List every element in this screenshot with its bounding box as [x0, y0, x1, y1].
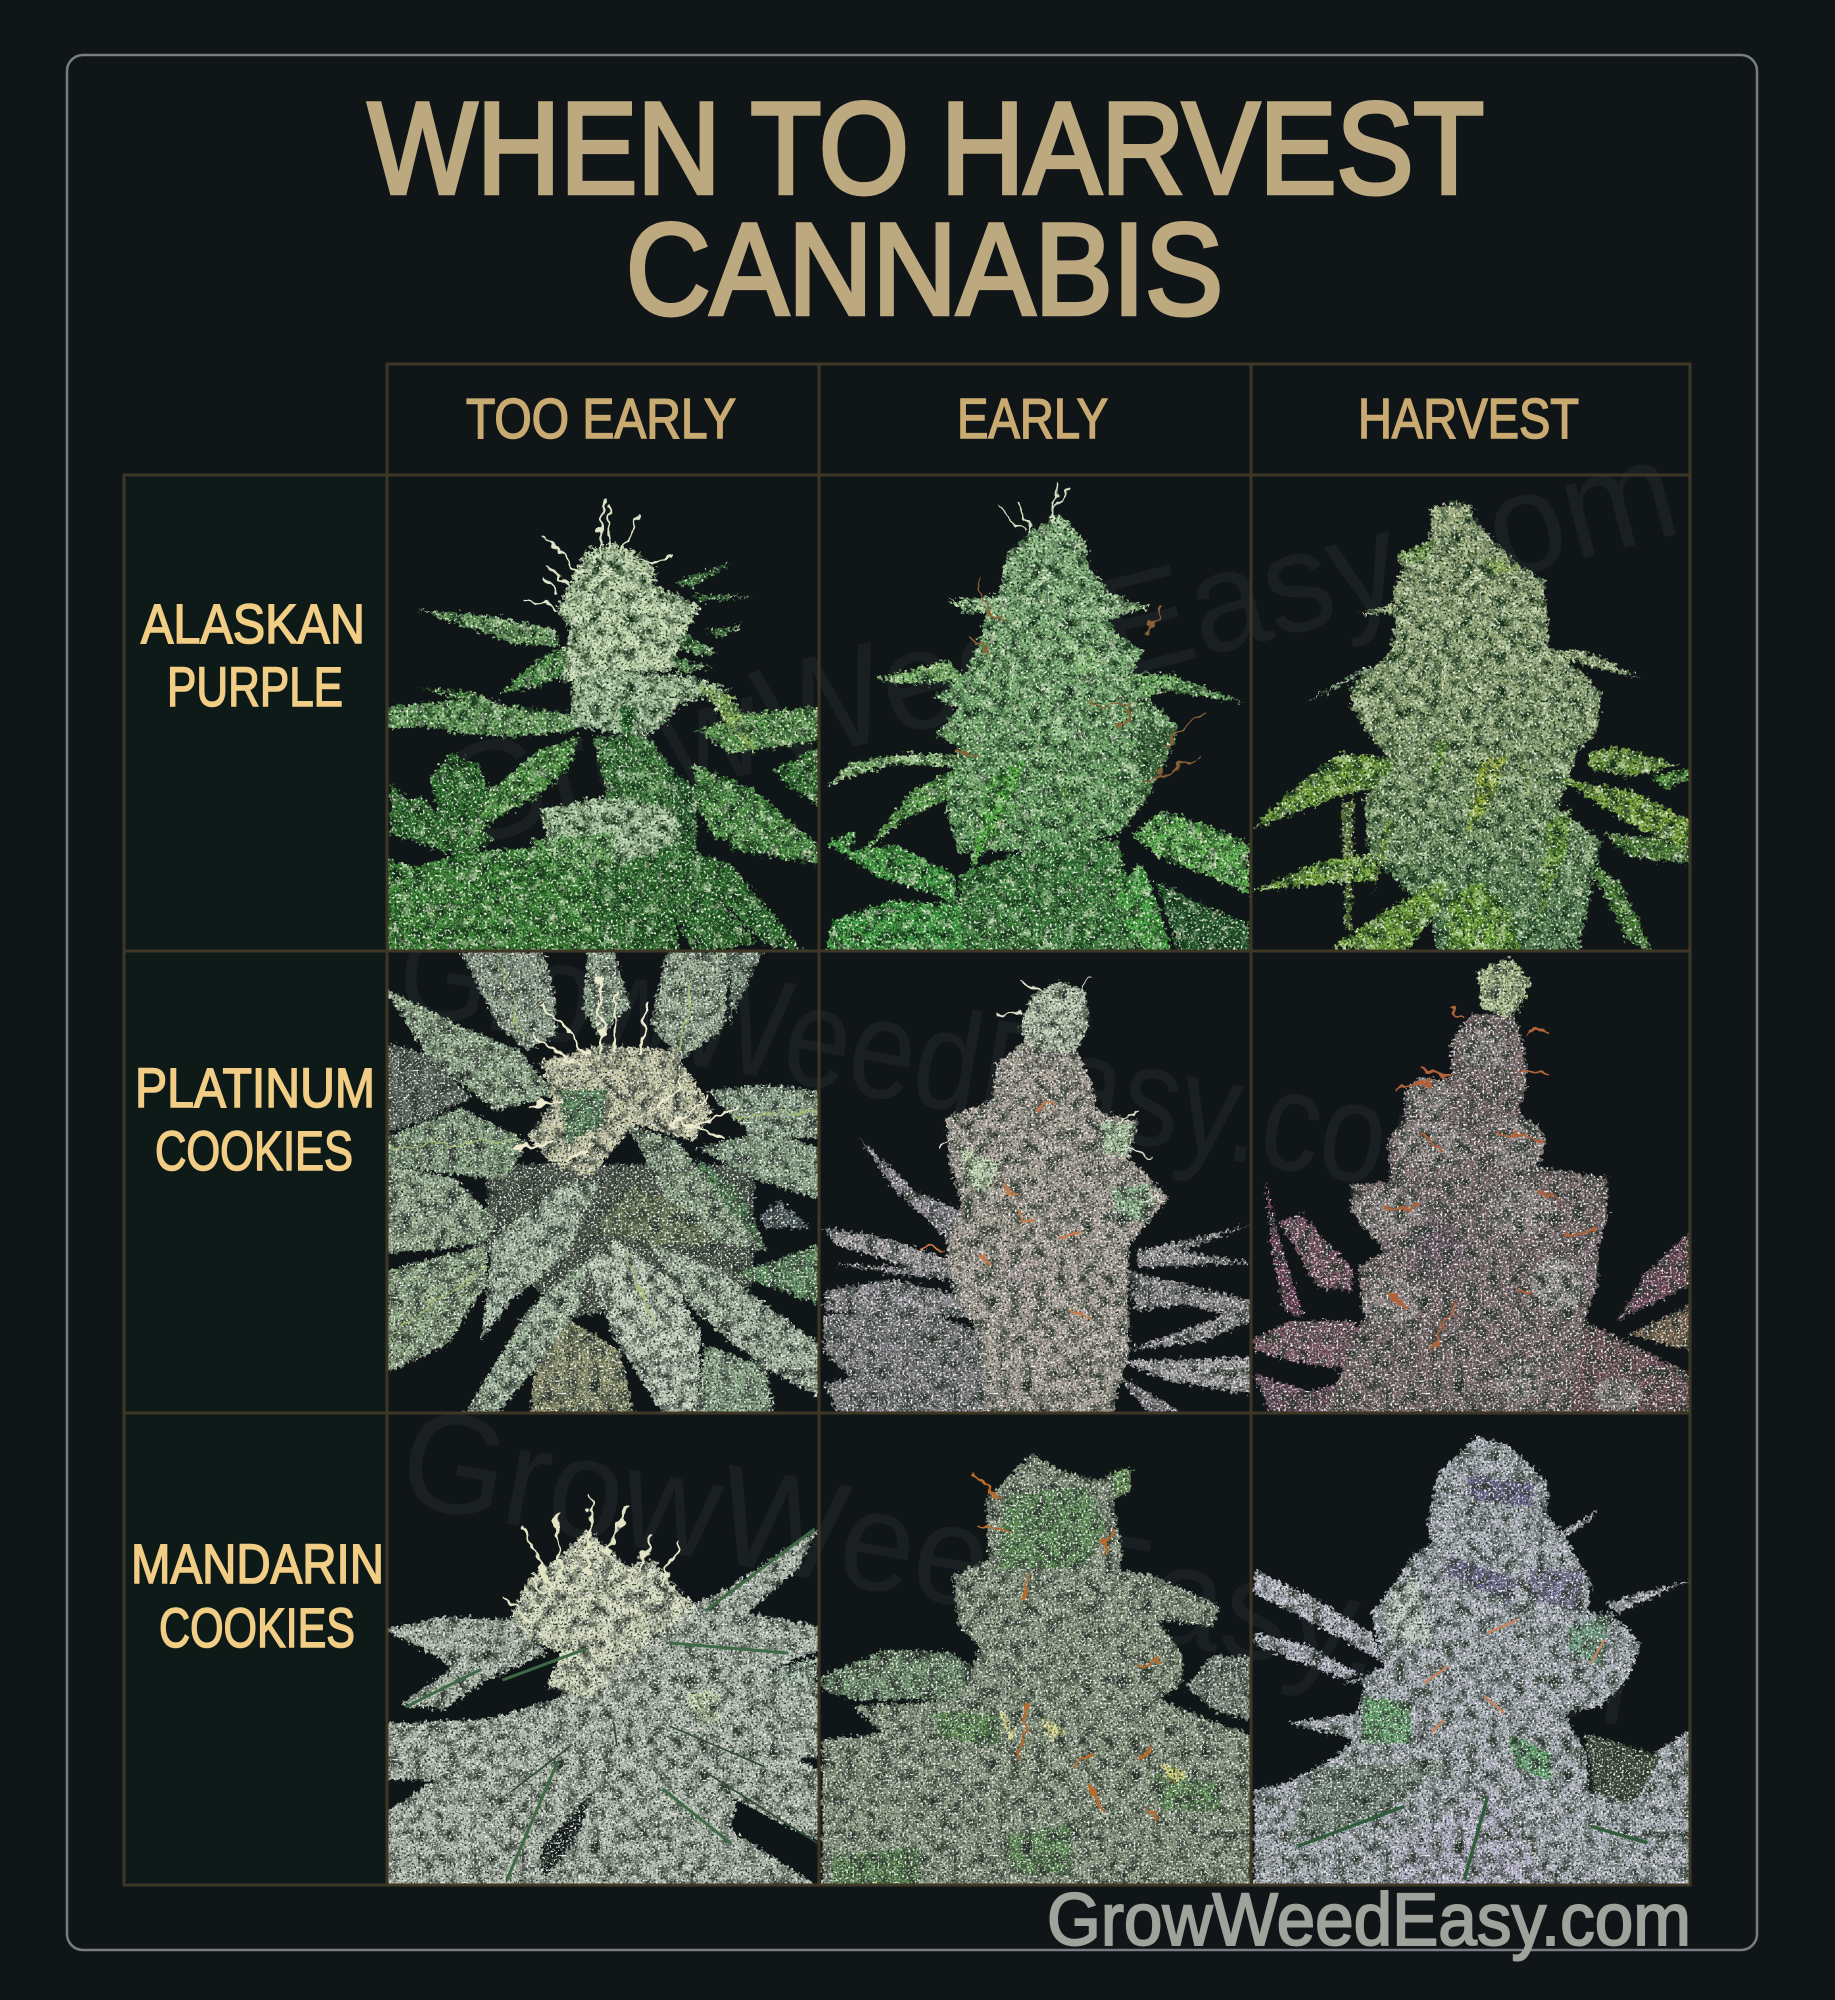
watermarks: GrowWeedEasy.com	[423, 408, 1692, 880]
row label: Mandarin Cookies: MANDARIN	[131, 1532, 384, 1595]
title: CANNABIS	[626, 196, 1223, 342]
row label: Alaskan Purple: PURPLE	[167, 655, 343, 718]
column headers: HARVEST	[1358, 387, 1579, 451]
row label: Alaskan Purple	[141, 592, 365, 718]
photo: Alaskan Purple harvest	[1252, 500, 1688, 950]
photo: Platinum Cookies too early	[388, 952, 818, 1412]
watermarks: GrowWeedEasy.com	[387, 886, 1498, 1234]
watermarks: GrowWeedEasy.com	[389, 1377, 1648, 1757]
column headers: TOO EARLY	[466, 387, 736, 451]
row label: Platinum Cookies	[135, 1056, 375, 1182]
table grid	[124, 364, 1690, 1885]
photo: Mandarin Cookies too early	[384, 1496, 820, 1888]
row label backgrounds	[124, 475, 387, 1885]
photo: Alaskan Purple early	[824, 482, 1250, 950]
photo: Mandarin Cookies early	[822, 1453, 1252, 1888]
website credit: GrowWeedEasy.com	[1047, 1878, 1691, 1961]
row label: Platinum Cookies: PLATINUM	[135, 1056, 375, 1119]
watermarks	[387, 408, 1692, 1757]
photo: Alaskan Purple too early	[388, 498, 818, 950]
title	[368, 75, 1484, 342]
row label: Alaskan Purple: ALASKAN	[141, 592, 365, 655]
column headers: EARLY	[957, 387, 1108, 451]
column headers	[466, 387, 1579, 451]
photo: Mandarin Cookies harvest	[1254, 1436, 1691, 1888]
photo: Platinum Cookies early	[820, 976, 1250, 1412]
title: WHEN TO HARVEST	[368, 75, 1484, 221]
row label: Mandarin Cookies: COOKIES	[159, 1596, 355, 1659]
row label: Platinum Cookies: COOKIES	[155, 1119, 353, 1182]
photo: Platinum Cookies harvest	[1252, 956, 1688, 1412]
row label: Mandarin Cookies	[131, 1532, 384, 1659]
